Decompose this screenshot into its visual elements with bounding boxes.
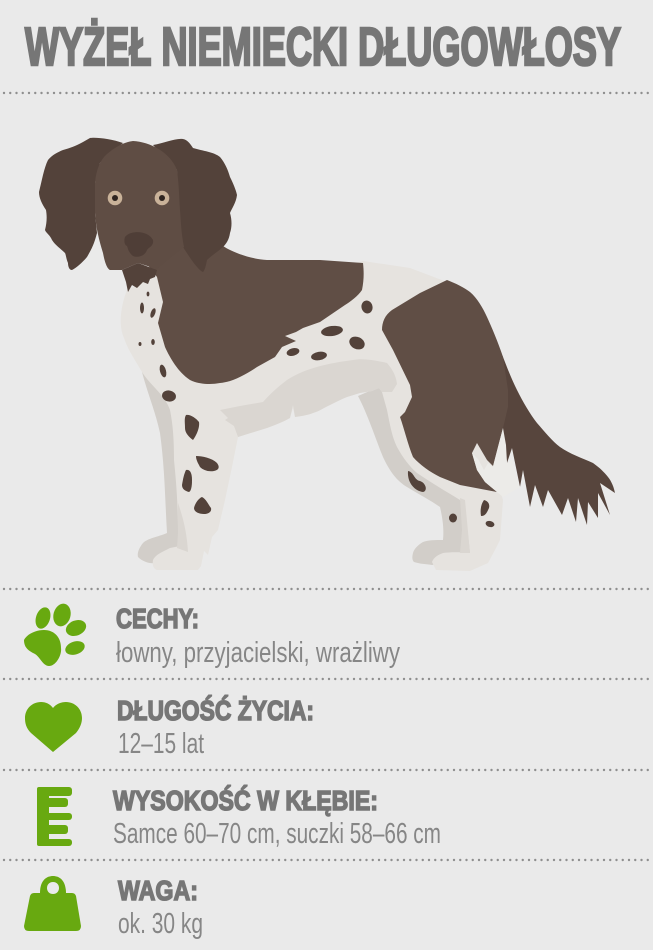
left ear	[39, 138, 123, 270]
icon: weight	[24, 876, 81, 931]
left eye	[108, 191, 122, 205]
spots	[138, 292, 495, 528]
heading: cechy: CECHY:	[116, 603, 199, 634]
text: wysokość: Samce 60–70 cm, suczki 58–66 cm	[113, 818, 441, 850]
icon: paw	[24, 602, 89, 666]
body light fur	[121, 261, 505, 571]
icon: ruler	[37, 787, 72, 846]
text: długość życia: 12–15 lat	[118, 728, 204, 760]
head	[95, 141, 184, 270]
heading: wysokość: WYSOKOŚĆ W KŁĘBIE:	[113, 785, 378, 816]
icon: heart	[25, 702, 82, 752]
heading: długość życia: DŁUGOŚĆ ŻYCIA:	[117, 695, 314, 726]
text: waga: ok. 30 kg	[118, 908, 203, 940]
chin fur	[122, 263, 157, 292]
right ear	[153, 139, 237, 272]
right eye	[155, 191, 169, 205]
white tuft	[472, 428, 520, 497]
far front leg	[138, 372, 195, 563]
belly shading	[220, 359, 397, 437]
medium shade hind leg	[460, 498, 470, 553]
text: cechy: łowny, przyjacielski, wrażliwy	[116, 637, 400, 669]
illustration: dog	[39, 138, 615, 571]
chest dark edge patch	[140, 235, 364, 384]
nose	[124, 232, 153, 257]
tail	[488, 320, 615, 525]
hind dark patch	[382, 280, 508, 492]
heading: waga: WAGA:	[118, 875, 198, 906]
far hind leg	[358, 380, 472, 565]
medium shade front leg	[177, 503, 188, 552]
